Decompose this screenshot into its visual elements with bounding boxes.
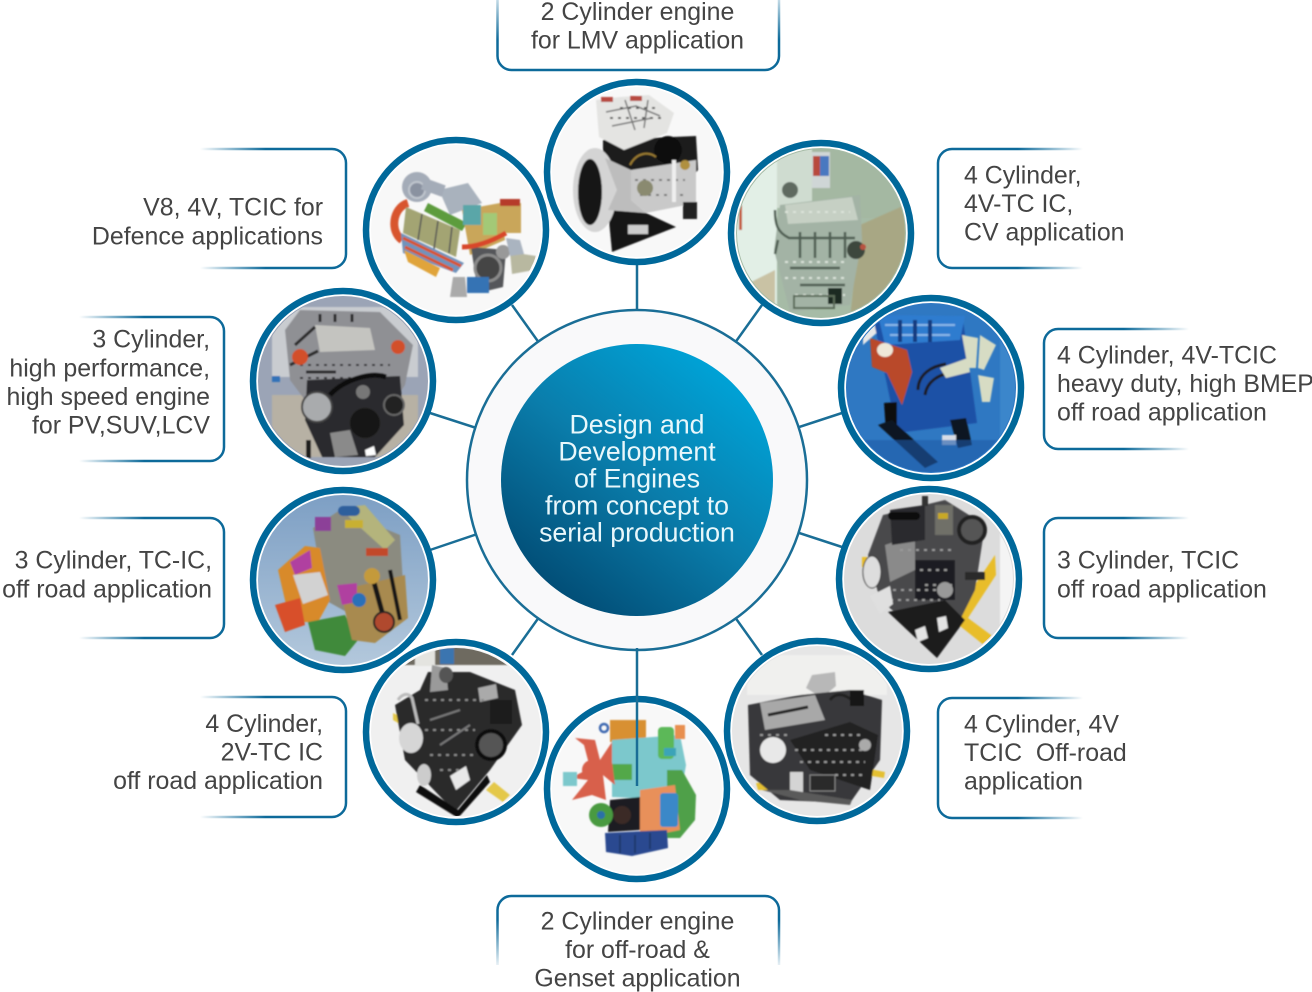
callout: 2 cylinder engine for off-road and genset [498,896,779,992]
icon: dark 3 cylinder engine on stand with yellow floor lines [862,496,1020,660]
callout: 2 cylinder engine for LMV application: for LMV application [531,26,744,54]
callout: 4 cylinder 4V TCIC off-road: TCIC Off-road [964,739,1127,767]
icon: green-grey engine photo [735,148,907,318]
callout: 3 cylinder TCIC off road: off road application [1057,576,1267,604]
node: V8 defence engine [366,140,546,320]
callout: 3 cylinder high performance: high performance, [9,354,210,382]
node: 4 cylinder CV engine [731,143,911,323]
callout: 2 cylinder engine for LMV application [498,0,779,70]
central hub [467,310,807,650]
hub inner disc [501,344,773,616]
callout: 4 cylinder 4V-TCIC heavy duty [1044,329,1312,449]
icon: white and black 2 cylinder engine [573,95,698,252]
hub outer ring [467,310,807,650]
callout: 2 cylinder engine for off-road and genset: Genset application [534,964,741,992]
callout: 3 cylinder TC-IC off road: off road application [2,576,212,604]
icon: silver and black engine photo [272,307,418,458]
callout: 4 cylinder 2V-TC IC off road [113,697,346,817]
callout: 4 cylinder 2V-TC IC off road: 2V-TC IC [221,738,323,766]
node: 4 cylinder 4V-TCIC heavy duty engine [841,298,1021,478]
callout: 3 cylinder high performance: 3 Cylinder, [92,326,210,354]
callout: 4 cylinder 4V-TCIC heavy duty: 4 Cylinder, 4V-TCIC [1057,342,1277,370]
bottom spoke overlapping the engine [636,648,638,786]
icon: coloured 2 cylinder CAD engine [563,720,696,856]
icon: dark 4 cylinder engine photo on floor [747,655,887,805]
connector spokes [430,262,845,655]
icon: coloured 3 cylinder CAD engine [275,505,408,656]
hub title: serial production [539,518,735,548]
callout: 4 cylinder 4V TCIC off-road [938,698,1127,818]
callout: 4 cylinder 4V-TC IC CV application: CV application [964,218,1125,246]
node: 4 cylinder 2V-TC off road engine [366,642,546,822]
icon: dark 4 cylinder engine photo [393,645,523,818]
callout: V8 defence applications: V8, 4V, TCIC for [143,194,323,222]
hub title [539,410,735,548]
callout: 4 cylinder 4V TCIC off-road: application [964,768,1083,796]
node: 2 cylinder off-road and genset engine [547,648,727,879]
hub title: Design and [569,410,705,440]
node: 3 cylinder high performance engine [253,291,433,471]
callout: 3 cylinder high performance [7,317,224,461]
callout: 4 cylinder 4V-TC IC CV application: 4V-TC IC, [964,190,1073,218]
callout: 2 cylinder engine for off-road and genset: 2 Cylinder engine [541,908,734,936]
icon: coloured V8 engine CAD [394,172,536,297]
callout: 3 cylinder high performance: for PV,SUV,LCV [32,412,210,440]
callout: 3 cylinder TC-IC off road [2,518,224,638]
callout: 3 cylinder TC-IC off road: 3 Cylinder, TC-IC, [15,546,212,574]
node: 3 cylinder TC-IC engine [253,490,433,670]
callout: V8 defence applications [92,149,346,268]
callout: 3 cylinder TCIC off road: 3 Cylinder, TCIC [1057,546,1239,574]
callout: 4 cylinder 4V TCIC off-road: 4 Cylinder, 4V [964,710,1119,738]
callout: V8 defence applications: Defence applications [92,222,323,250]
hub title: Development [558,436,716,466]
node: 3 cylinder TCIC off road engine [839,489,1020,669]
callout: 2 cylinder engine for off-road and genset: for off-road & [565,936,710,964]
node: 4 cylinder 4V TCIC off-road engine [727,641,907,821]
callout: 4 cylinder 4V-TCIC heavy duty: heavy duty, high BMEP [1057,370,1312,398]
hub title: from concept to [545,490,729,520]
node: 2 cylinder LMV engine [547,82,727,262]
callout: 4 cylinder 4V-TCIC heavy duty: off road application [1057,398,1267,426]
callout: 3 cylinder high performance: high speed engine [7,383,210,411]
callout: 4 cylinder 4V-TC IC CV application [938,149,1125,268]
callout: 4 cylinder 4V-TC IC CV application: 4 Cylinder, [964,162,1082,190]
icon: blue engine with red manifold and fan [862,316,1015,472]
hub title: of Engines [574,464,700,494]
callout: 4 cylinder 2V-TC IC off road: off road application [113,767,323,795]
callout: 3 cylinder TCIC off road [1044,518,1267,638]
callout: 4 cylinder 2V-TC IC off road: 4 Cylinder, [205,710,323,738]
